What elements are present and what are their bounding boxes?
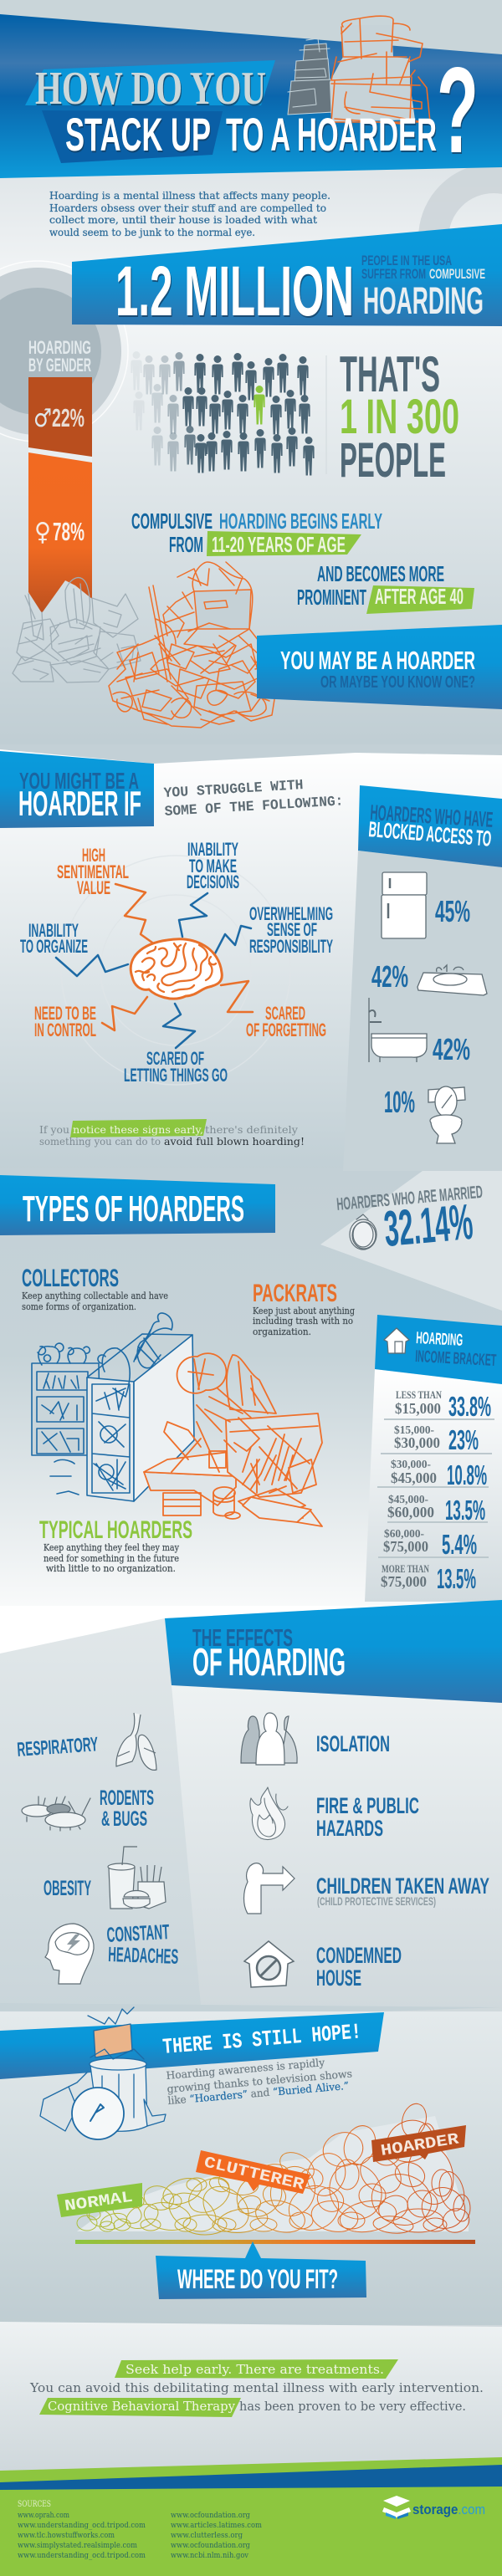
factor labels: INABILITY	[28, 920, 79, 941]
table: income rows: $45,000	[391, 1469, 437, 1486]
heading: you might be a hoarder if	[0, 751, 154, 828]
sources: www.oprah.com	[18, 2511, 69, 2520]
icon: orange junk pile sketch	[109, 562, 275, 728]
text: notice these signs early	[39, 1119, 305, 1147]
intro text: Hoarders obsess over their stuff and are compelled to	[49, 202, 326, 214]
decorative title parallelograms	[25, 60, 275, 163]
text: packrats: organization.	[253, 1326, 311, 1337]
text: notice these signs early: something you can do to	[39, 1136, 161, 1147]
banner: there is still hope	[0, 2012, 384, 2079]
text: collectors: COLLECTORS	[22, 1265, 119, 1292]
text: typical hoarders: need for something in the future	[44, 1552, 179, 1564]
list: social effects: CONDEMNED	[316, 1943, 402, 1968]
sources	[18, 2500, 262, 2560]
text: packrats	[253, 1280, 356, 1337]
footer	[0, 2457, 502, 2576]
sources: SOURCES	[18, 2500, 51, 2509]
text: notice these signs early: there's definitely	[205, 1124, 298, 1136]
tag: normal	[57, 2183, 142, 2217]
text: seek help: You can avoid this debilitating mental illness with early intervention.	[29, 2380, 484, 2395]
tag: normal: NORMAL	[64, 2188, 134, 2216]
chart: people pictogram	[131, 351, 315, 475]
subheading: you struggle with: YOU STRUGGLE WITH	[163, 778, 304, 802]
list: physical effects: RESPIRATORY	[17, 1733, 99, 1761]
stat: bathtub: 42%	[433, 1032, 470, 1066]
text: hoarding awareness: Hoarding awareness is rapidly	[166, 2056, 325, 2082]
scale bar	[75, 2240, 475, 2244]
heading: you might be a hoarder if: YOU MIGHT BE A	[19, 768, 139, 794]
factor labels: OF FORGETTING	[246, 1020, 326, 1040]
title band	[0, 14, 502, 178]
panel: 1.2 million banner	[72, 224, 502, 330]
callout: where do you fit	[156, 2241, 366, 2299]
table: income rows: $15,000-	[394, 1424, 434, 1437]
factor labels: SCARED OF	[146, 1048, 204, 1069]
factor labels: RESPONSIBILITY	[249, 936, 333, 957]
text: typical hoarders: TYPICAL HOARDERS	[39, 1516, 192, 1544]
subheading: you struggle with: SOME OF THE FOLLOWING:	[164, 794, 344, 820]
text: packrats: PACKRATS	[253, 1280, 337, 1307]
logo: storage.com	[382, 2496, 485, 2519]
table: income rows	[377, 1388, 494, 1594]
stat: hoarders who are married	[336, 1183, 484, 1257]
list: physical effects: CONSTANT	[106, 1920, 170, 1947]
sources: www.simplystated.realsimple.com	[18, 2541, 137, 2550]
sources: www.understanding_ocd.tripod.com	[18, 2521, 146, 2530]
icon: head	[45, 1924, 94, 1984]
text: typical hoarders: with little to no organization.	[46, 1562, 176, 1574]
text: collectors	[22, 1265, 168, 1312]
list: physical effects	[17, 1713, 179, 1984]
table: income rows: $60,000-	[384, 1528, 424, 1541]
heading: the effects of hoarding	[165, 1600, 502, 1703]
factor labels: INABILITY	[187, 839, 238, 860]
chart: hoarding by gender bar: ♀	[34, 518, 51, 547]
icon: orange junk pile	[144, 1353, 322, 1526]
sources: www.clutterless.org	[171, 2531, 243, 2540]
icon: fridge	[382, 872, 427, 938]
factor labels: HIGH	[82, 845, 105, 866]
text: packrats: Keep just about anything	[253, 1305, 356, 1316]
text: notice these signs early: avoid full blown hoarding!	[164, 1136, 305, 1147]
table: income rows: $45,000-	[388, 1494, 428, 1506]
decorative brush circle: left	[0, 261, 128, 442]
intro text: collect more, until their house is loaded with what	[49, 213, 317, 226]
table: income rows: LESS THAN	[396, 1388, 442, 1401]
stat: toilet: 10%	[384, 1085, 415, 1119]
intro text	[49, 189, 330, 238]
list: physical effects: OBESITY	[44, 1877, 91, 1900]
list: physical effects: HEADACHES	[108, 1943, 179, 1969]
callout: where do you fit: WHERE DO YOU FIT?	[177, 2264, 338, 2294]
chart: hoarding by gender bar: BY GENDER	[28, 355, 91, 376]
table: income rows: $15,000	[395, 1400, 441, 1417]
panel: blocked access	[343, 785, 502, 1171]
factor labels: TO MAKE	[189, 856, 237, 877]
banner side text: PEOPLE IN THE USA	[361, 253, 452, 268]
icon: person with arrow	[244, 1863, 295, 1914]
icon: lungs	[116, 1713, 156, 1770]
lightning bolts	[56, 884, 253, 1048]
factor labels: OVERWHELMING	[249, 903, 333, 924]
list: social effects: ISOLATION	[316, 1731, 390, 1756]
text: hoarding awareness: like “Hoarders” and “Buried Alive.”	[167, 2079, 349, 2107]
table: income rows: MORE THAN	[382, 1562, 429, 1575]
heading: types of hoarders	[0, 1175, 275, 1235]
heading: types of hoarders: TYPES OF HOARDERS	[23, 1188, 244, 1229]
text: seek help: Seek help early. There are treatments.	[126, 2362, 384, 2377]
factor labels: DECISIONS	[187, 871, 239, 892]
list: social effects	[241, 1713, 489, 1991]
icon: isolation people	[241, 1713, 297, 1765]
icon: bathtub	[369, 998, 427, 1062]
sources: www.articles.latimes.com	[171, 2521, 262, 2530]
factor labels: SCARED	[265, 1003, 305, 1024]
icon: condemned house	[244, 1941, 294, 1987]
icon: ring	[350, 1214, 376, 1250]
text: typical hoarders	[39, 1516, 192, 1574]
text: hoarding awareness: growing thanks to television shows	[166, 2067, 352, 2095]
scribble mound	[77, 2101, 473, 2239]
chart: hoarding by gender bar: 22%	[52, 403, 85, 432]
table: income rows: $30,000	[394, 1434, 440, 1451]
list: physical effects: RODENTS	[100, 1786, 154, 1810]
chart title: HOARDING	[28, 337, 91, 358]
decorative rings behind brain	[61, 856, 290, 1085]
table: income rows: $75,000	[381, 1573, 427, 1590]
chart: hoarding by gender bar: ♂	[33, 404, 52, 433]
text: collectors: some forms of organization.	[22, 1301, 136, 1312]
chart: clutter scale	[57, 2101, 475, 2244]
factor labels	[20, 839, 333, 1086]
sources: www.ncbi.nlm.nih.gov	[171, 2551, 249, 2560]
list: social effects: FIRE & PUBLIC	[316, 1793, 419, 1818]
tag: clutterer	[196, 2150, 310, 2194]
stat: sink: 42%	[371, 959, 408, 994]
sources: www.understanding_ocd.tripod.com	[18, 2551, 146, 2560]
text: packrats: including trash with no	[253, 1315, 353, 1326]
text: hoarding awareness	[166, 2056, 352, 2107]
text: hoarding begins early: COMPULSIVE	[131, 509, 213, 534]
factor labels: LETTING THINGS GO	[124, 1065, 228, 1086]
table: income rows: $60,000	[387, 1504, 434, 1521]
factor labels: NEED TO BE	[34, 1003, 96, 1024]
list: physical effects: & BUGS	[101, 1807, 147, 1831]
icon: toilet	[428, 1086, 465, 1143]
icon: blue shelf sketch	[32, 1313, 194, 1501]
icon: trash can with TV	[40, 2007, 166, 2139]
text: typical hoarders: Keep anything they feel they may	[44, 1541, 179, 1553]
decorative brush circle: top right	[433, 178, 502, 299]
title: STACK UP	[65, 108, 211, 161]
text: collectors: Keep anything collectable and have	[22, 1290, 168, 1301]
icon: brain	[131, 939, 222, 999]
list: social effects: (CHILD PROTECTIVE SERVICES)	[317, 1894, 436, 1908]
icon: sketched stacked boxes	[288, 16, 430, 124]
table: income rows: $75,000	[383, 1538, 428, 1555]
text: hoarding begins early: 11-20 YEARS OF AGE	[212, 532, 346, 557]
text: seek help: has been proven to be very effective.	[239, 2399, 466, 2414]
text: that's 1 in 300 people	[326, 346, 459, 488]
table: income rows: $30,000-	[391, 1459, 431, 1471]
logo: storage.com: storage.com	[412, 2502, 485, 2517]
sources: www.ocfoundation.org	[171, 2541, 250, 2550]
panel: income bracket	[365, 1315, 502, 1602]
chart: hoarding by gender bar	[28, 337, 92, 613]
factor labels: SENTIMENTAL	[57, 861, 129, 882]
icon: fast food	[108, 1847, 166, 1909]
subheading: you struggle with	[163, 778, 344, 820]
icon: fire	[250, 1787, 288, 1839]
banner side text: SUFFER FROM	[361, 266, 426, 282]
text: hoarding begins early	[131, 509, 474, 614]
title: HOW DO YOU	[35, 63, 266, 115]
sources: www.tlc.howstuffworks.com	[18, 2531, 115, 2540]
icon: grey junk pile sketch	[13, 578, 141, 682]
callout: you may be a hoarder	[257, 625, 502, 709]
banner: there is still hope: THERE IS STILL HOPE!	[161, 2019, 362, 2060]
text: hoarding begins early: PROMINENT	[297, 585, 366, 610]
heading: you might be a hoarder if: HOARDER IF	[18, 784, 141, 823]
tag: hoarder: HOARDER	[379, 2129, 460, 2160]
text: hoarding begins early: HOARDING BEGINS EARLY	[219, 509, 382, 534]
sources: www.ocfoundation.org	[171, 2511, 250, 2520]
factor labels: VALUE	[77, 877, 110, 898]
icon: sink	[417, 965, 487, 995]
icon: bugs	[22, 1797, 90, 1831]
intro text: Hoarding is a mental illness that affects many people.	[49, 189, 330, 202]
text: notice these signs early: notice these signs early,	[73, 1124, 203, 1136]
heading: the effects of hoarding: THE EFFECTS	[192, 1625, 293, 1652]
banner side text	[361, 253, 485, 322]
tag: hoarder	[371, 2125, 466, 2162]
stat: fridge: 45%	[435, 894, 470, 928]
factor labels: TO ORGANIZE	[20, 936, 88, 957]
text: notice these signs early: If you	[39, 1124, 69, 1136]
text: seek help	[29, 2359, 484, 2417]
list: social effects: HAZARDS	[316, 1816, 383, 1841]
text: seek help: Cognitive Behavioral Therapy	[48, 2399, 236, 2414]
icon: house	[384, 1328, 409, 1353]
intro text: would seem to be junk to the normal eye.	[49, 226, 255, 238]
list: social effects: HOUSE	[316, 1965, 361, 1991]
factor labels: SENSE OF	[267, 919, 317, 940]
factor labels: IN CONTROL	[34, 1020, 96, 1040]
heading: the effects of hoarding: OF HOARDING	[192, 1640, 346, 1684]
title	[35, 42, 479, 178]
chart: hoarding by gender bar: 78%	[53, 517, 85, 546]
text: hoarding begins early: FROM	[169, 532, 203, 557]
tag: clutterer: CLUTTERER	[202, 2153, 306, 2194]
